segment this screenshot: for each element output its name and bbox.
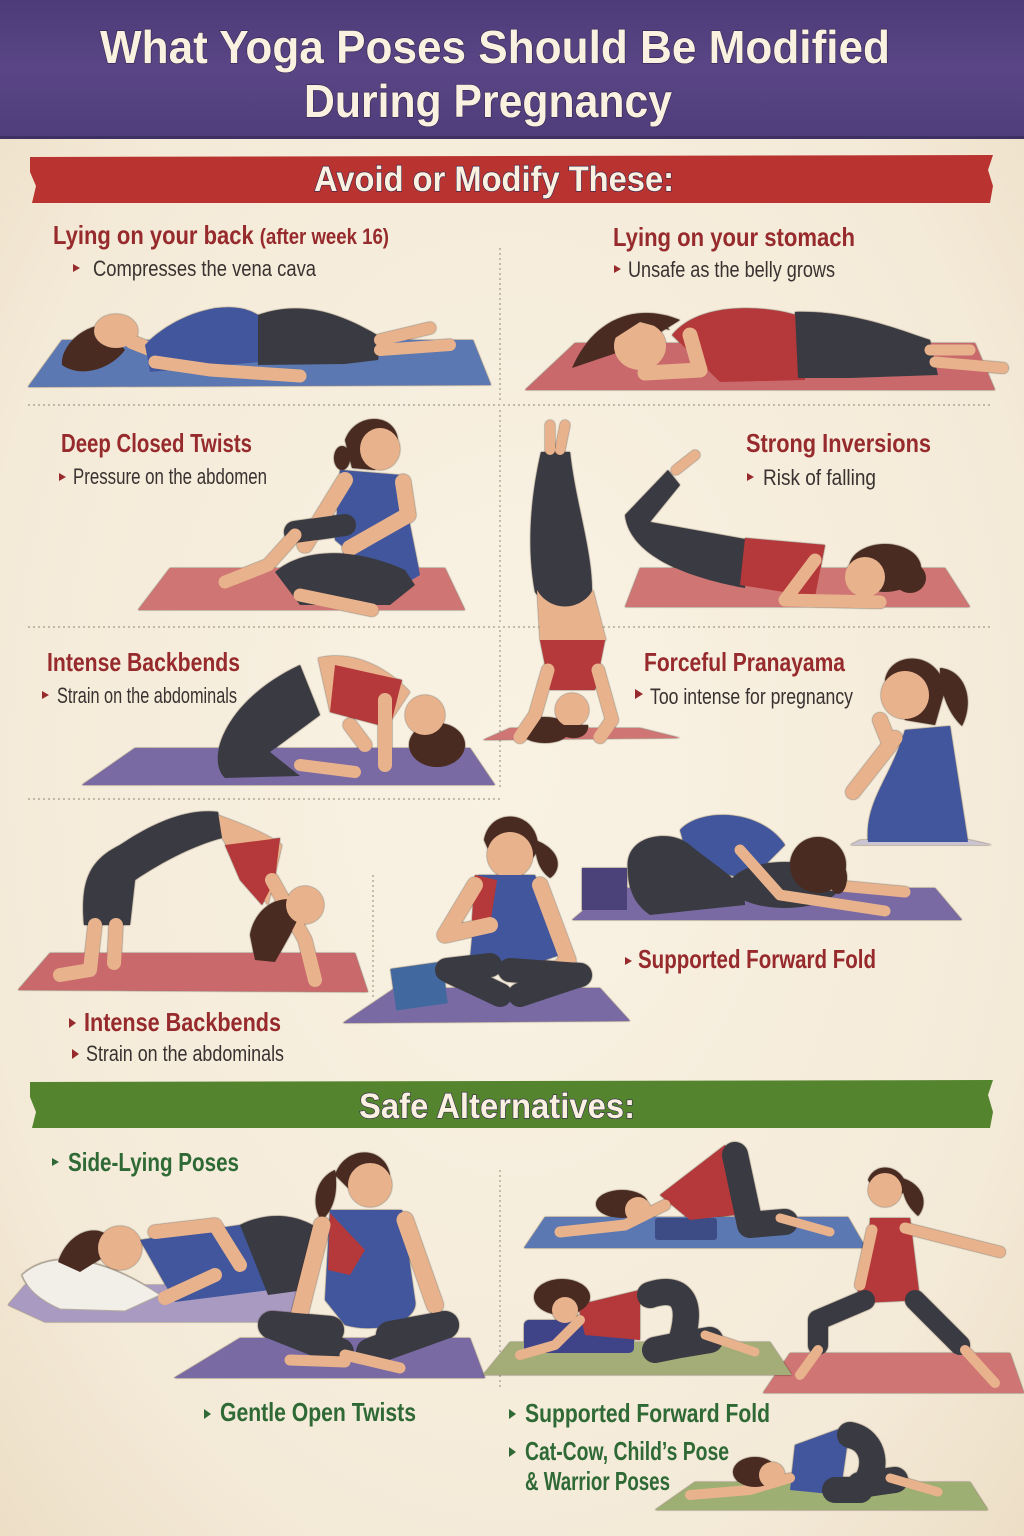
panel: lying on your back xyxy=(28,220,491,387)
figure: prone leg raise xyxy=(625,455,970,607)
figure: seated twist xyxy=(138,419,465,610)
title xyxy=(100,21,890,127)
note: strain xyxy=(42,683,237,708)
note: too intense: Too intense for pregnancy xyxy=(650,684,853,709)
panel: forceful pranayama xyxy=(635,647,992,845)
header band xyxy=(0,0,1024,139)
label: gentle open twists: Gentle Open Twists xyxy=(220,1397,416,1427)
panel: strong inversions xyxy=(625,428,970,607)
figure: child pose with bolster on blue mat xyxy=(524,1145,866,1248)
figure: seated open twist xyxy=(174,1152,485,1378)
banner: safe alternatives xyxy=(30,1080,993,1128)
label: supported forward fold alternatives: Supported Forward Fold xyxy=(525,1398,770,1428)
panel: deep closed twists xyxy=(59,419,465,610)
panel: lying on your stomach xyxy=(525,222,1003,390)
figure: warrior pose xyxy=(763,1168,1024,1393)
banner: avoid or modify xyxy=(30,155,993,203)
figure: lying on stomach on red mat xyxy=(525,308,1003,390)
label: cat-cow, child's pose and warrior poses: Cat-Cow, Child’s Pose xyxy=(525,1436,729,1466)
panel: side-lying poses xyxy=(8,1147,485,1427)
figure: lying on back on blue mat xyxy=(28,307,491,387)
title: What Yoga Poses Should Be Modified xyxy=(100,21,890,73)
note: unsafe: Unsafe as the belly grows xyxy=(628,257,835,282)
heading: intense backbends: Intense Backbends xyxy=(47,647,240,677)
note: strain: Strain on the abdominals xyxy=(57,683,237,708)
label: side-lying poses: Side-Lying Poses xyxy=(68,1147,239,1177)
heading: intense backbends lower: Intense Backbends xyxy=(84,1007,281,1037)
label: supported forward fold: Supported Forward Fold xyxy=(638,944,876,974)
figure: kneeling backbend xyxy=(82,656,495,785)
heading: strong inversions: Strong Inversions xyxy=(746,428,931,458)
note: vena cava: Compresses the vena cava xyxy=(93,256,317,281)
note: risk of falling: Risk of falling xyxy=(763,465,876,490)
label: cat-cow, child's pose and warrior poses: & Warrior Poses xyxy=(525,1466,670,1496)
figure: child's pose on green mat xyxy=(655,1425,988,1510)
banner: avoid or modify: Avoid or Modify These: xyxy=(314,160,674,199)
panel: intense backbends upper xyxy=(42,647,495,785)
note: pressure: Pressure on the abdomen xyxy=(73,464,267,489)
figure: headstand xyxy=(483,425,680,743)
figure: supported forward fold xyxy=(572,815,962,920)
figure: bridge pose xyxy=(18,811,368,992)
label: cat-cow, child's pose and warrior poses xyxy=(509,1436,729,1496)
figure: side-lying on mat with pillow xyxy=(8,1216,320,1322)
heading: lying on your back: Lying on your back (after week 16) xyxy=(53,220,389,250)
heading: deep closed twists: Deep Closed Twists xyxy=(61,428,252,458)
panel: intense backbends lower xyxy=(69,1007,284,1066)
heading: forceful pranayama: Forceful Pranayama xyxy=(644,647,845,677)
figure: seated breathing xyxy=(850,659,992,845)
panel: supported forward fold upper xyxy=(572,815,962,974)
figure: seated with hand on heart xyxy=(343,817,630,1023)
figure: forward fold on green mat xyxy=(483,1279,792,1375)
banner: safe alternatives: Safe Alternatives: xyxy=(359,1087,635,1126)
heading: lying on your stomach: Lying on your stomach xyxy=(613,222,855,252)
title: During Pregnancy xyxy=(304,75,672,127)
note: strain lower: Strain on the abdominals xyxy=(86,1041,284,1066)
